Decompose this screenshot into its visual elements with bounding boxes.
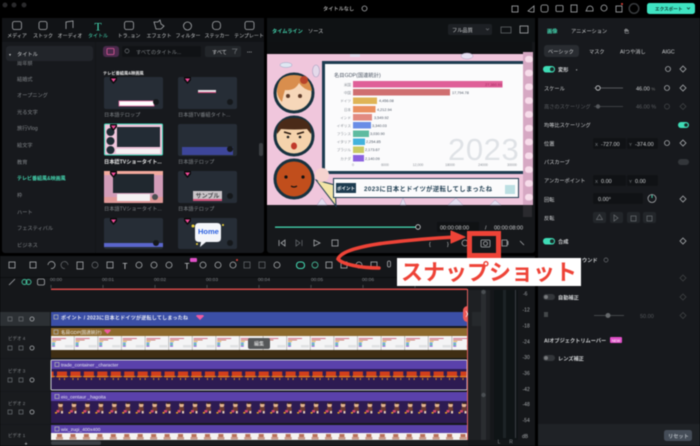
- timeline toolbar: [9, 258, 390, 271]
- callout: snapshot label: スナップショット: [401, 260, 577, 285]
- player header: ソース: [308, 28, 323, 35]
- bar chart: nominal GDP: 4,456.08: [379, 99, 394, 103]
- transform section: 0.00°: [598, 197, 611, 203]
- reset footer: リセット: [668, 433, 689, 440]
- transform section: 46.00 %: [636, 104, 656, 110]
- template card 1: [104, 77, 163, 118]
- library tabs: トラ..ョン: [118, 34, 140, 40]
- template card 6: サンプル: [196, 193, 219, 200]
- template card 3 selected: [104, 124, 162, 166]
- auto correction section: 50.00: [640, 314, 654, 320]
- category sidebar: 教育: [17, 158, 27, 166]
- audio meter scale: -18: [522, 324, 530, 330]
- category sidebar: オープニング: [17, 91, 48, 99]
- transform section: 変形: [558, 66, 569, 74]
- transform section: ▪: [576, 67, 578, 72]
- video track 1: [0, 425, 467, 440]
- template card 6: 日本語テロップ: [178, 204, 215, 212]
- bar chart: nominal GDP: 3,340.03: [372, 124, 387, 128]
- property sub tabs: マスク: [589, 48, 605, 56]
- search bar: すべてのタイトル...: [136, 48, 181, 56]
- export button: [647, 3, 695, 14]
- template card 6: [178, 171, 237, 212]
- decorative stickers: [280, 53, 501, 205]
- library tabs: タイトル: [88, 32, 108, 40]
- callout: snapshot button highlight: [470, 234, 498, 256]
- video preview: [267, 42, 533, 206]
- panel: player: [267, 18, 535, 253]
- bar chart: nominal GDP: 中国: [344, 90, 351, 95]
- reset footer: [538, 424, 700, 446]
- library tabs: ストック: [33, 34, 53, 40]
- bar chart: nominal GDP: 2,173.67: [365, 148, 380, 152]
- category sidebar: 結婚式: [17, 75, 33, 83]
- transform section: 均等比スケーリング: [544, 121, 591, 129]
- transform section: -727.00: [601, 142, 620, 148]
- library tabs: T: [94, 20, 102, 34]
- category sidebar: 周年祭: [17, 59, 33, 67]
- audio meter scale: -6: [523, 292, 528, 298]
- template card 7: [104, 218, 163, 249]
- timeline ruler: 00:04: [258, 277, 270, 283]
- audio meter scale: dB: [522, 434, 529, 440]
- transform section: 46.00 %: [636, 86, 655, 92]
- bar chart: nominal GDP: イギリス: [337, 123, 351, 128]
- film strip extension: [523, 205, 532, 217]
- film strip: [523, 52, 533, 205]
- bar chart: nominal GDP: フランス: [337, 131, 351, 136]
- video track 4: 編集: [254, 340, 264, 348]
- property sub tabs: [544, 45, 675, 57]
- library scrollbar: [259, 143, 263, 156]
- bar chart: nominal GDP: 2,140.09: [365, 157, 380, 161]
- library tabs: メディア: [7, 32, 27, 40]
- template card 3 selected: 日本語TVショータイト...: [104, 158, 162, 166]
- library tabs: フィルター: [176, 32, 200, 40]
- property tabs: [547, 27, 629, 35]
- transform section: Y: [629, 142, 632, 147]
- timeline ruler: [9, 277, 467, 290]
- AI object remover: NEW: [612, 339, 621, 343]
- transform section: X: [595, 179, 598, 184]
- video track 2: [0, 392, 467, 424]
- transform section: スケール: [544, 86, 565, 92]
- bar chart: nominal GDP: 12,000: [413, 163, 423, 167]
- template card 8: [178, 218, 237, 249]
- compositing section: [543, 238, 686, 246]
- character avatars: [275, 74, 313, 198]
- video track 2: ビデオ 2: [8, 400, 26, 407]
- category sidebar: ビジネス: [17, 241, 38, 249]
- bar chart: nominal GDP: 24000: [478, 163, 488, 167]
- transform section: 反転: [544, 215, 554, 222]
- bar chart: nominal GDP: イタリア: [337, 139, 351, 144]
- library tabs: オーディオ: [58, 32, 82, 40]
- bar chart: nominal GDP: インド: [340, 116, 351, 120]
- timeline toolbar: T: [185, 262, 190, 271]
- template card 5: [104, 171, 163, 212]
- timeline toolbar: T: [123, 262, 128, 271]
- category sidebar: 絵文字: [17, 141, 33, 149]
- property tabs: 画像: [547, 27, 558, 35]
- playback progress: 00:00:08:00: [494, 226, 523, 232]
- bar chart: nominal GDP: 17,794.78: [452, 91, 469, 95]
- panel: timeline: [0, 256, 535, 446]
- background section: ウンド: [582, 257, 598, 264]
- category sidebar: ▾: [9, 52, 11, 57]
- library tabs: [7, 20, 264, 40]
- panel: media library: [2, 18, 264, 253]
- transform section: アンカーポイント: [544, 176, 585, 184]
- transform section: 高さのスケーリング: [544, 102, 591, 110]
- lens correction: [543, 354, 584, 362]
- audio meter scale: -36: [522, 371, 530, 377]
- lens correction: レンズ補正: [558, 354, 584, 362]
- template grid: [103, 70, 237, 249]
- category sidebar: [6, 46, 93, 249]
- playback controls: {: [429, 242, 431, 248]
- library tabs: ステッカー: [204, 34, 230, 40]
- video track 4: ビデオ 4: [8, 335, 26, 342]
- timeline ruler: 00:06: [362, 277, 374, 283]
- category sidebar: テレビ番組風&映画風: [17, 175, 66, 182]
- arrow to snapshot button: [338, 231, 465, 268]
- playhead: [463, 289, 472, 440]
- video track 1: wix_zugi_400x400: [61, 427, 101, 433]
- audio meter scale: -42: [522, 387, 530, 393]
- video track 1: ビデオ 1: [8, 432, 26, 439]
- bar chart: nominal GDP: ブラジル: [337, 147, 351, 152]
- playback controls: [279, 240, 524, 248]
- category sidebar: ハート: [17, 210, 33, 216]
- video track 3: [0, 359, 467, 391]
- template card 4: [178, 124, 237, 166]
- property sub tabs: AIつや消し: [620, 48, 646, 56]
- template card 2: 日本語TV番組タイト...: [178, 110, 230, 118]
- timeline ruler: 00:02: [154, 277, 166, 283]
- bar chart: nominal GDP: 米国: [344, 82, 351, 87]
- audio meter scale: L: [498, 440, 501, 446]
- playback progress: /: [485, 226, 487, 232]
- transform section: -374.00: [635, 142, 654, 148]
- ice cream sticker: [315, 168, 336, 206]
- audio meter scale: -54: [522, 418, 530, 424]
- video track 2: eio_centaur _hagoita: [61, 394, 106, 400]
- compositing section: 合成: [558, 238, 569, 246]
- bar chart: nominal GDP: 名目GDP(国連統計): [334, 71, 381, 79]
- background section: [582, 257, 608, 264]
- playback progress: [275, 222, 523, 232]
- timeline bottom bar: [0, 440, 468, 446]
- property tabs: アニメーション: [571, 28, 607, 35]
- window title bar: [2, 2, 639, 13]
- category sidebar: タイトル: [17, 50, 38, 58]
- template grid: テレビ番組風&映画風: [103, 70, 145, 76]
- template card 1: 日本語テロップ: [104, 110, 141, 118]
- bar chart: nominal GDP: 2023: [448, 132, 519, 167]
- template card 5: 日本語TVショータイト...: [104, 204, 162, 212]
- transform section: [543, 66, 689, 223]
- transform section: 回転: [544, 196, 554, 204]
- timeline ruler: 00:03: [206, 277, 218, 283]
- player header: [272, 24, 528, 35]
- bar chart: nominal GDP: 3,030.90: [370, 132, 385, 136]
- video track 4: [0, 327, 467, 358]
- category sidebar: 旅行Vlog: [17, 124, 38, 132]
- category sidebar: 光る文字: [17, 108, 38, 116]
- caption bar: 2023に日本とドイツが逆転してしまったね: [364, 184, 493, 193]
- transform section: 位置: [544, 140, 554, 148]
- audio meter scale: -48: [522, 402, 530, 408]
- audio meter scale: -12: [522, 308, 530, 314]
- auto correction section: 自動補正: [558, 294, 579, 302]
- video track 3: ビデオ 3: [8, 368, 26, 374]
- bar chart: nominal GDP: 2,254.85: [366, 140, 381, 144]
- search bar: [103, 46, 252, 57]
- title track: ポイント / 2023に日本とドイツが逆転してしまったね: [61, 314, 188, 322]
- playback controls: }: [447, 242, 449, 248]
- category sidebar: フェスティバル: [17, 225, 53, 232]
- export button: エクスポート: [655, 6, 682, 12]
- property tabs: 色: [624, 27, 629, 35]
- audio meter scale: -30: [522, 355, 530, 361]
- timeline ruler: 00:01: [102, 277, 114, 283]
- player header: タイムライン: [272, 27, 303, 35]
- bar chart: nominal GDP: 日本: [344, 107, 351, 112]
- panel: properties: [538, 18, 700, 446]
- transform section: X: [595, 142, 598, 147]
- bar chart: nominal GDP: 18000: [445, 163, 455, 167]
- bar chart: nominal GDP: 27,360.93: [485, 83, 502, 87]
- player header: フル品質: [452, 26, 473, 34]
- timeline ruler: 00:00: [50, 277, 62, 283]
- window title bar: タイトルなし: [323, 4, 354, 12]
- bar chart: nominal GDP: カナダ: [340, 156, 351, 161]
- title track: [0, 312, 467, 326]
- transform section: Y: [629, 179, 632, 184]
- bar chart: nominal GDP: 3,549.92: [374, 116, 389, 120]
- audio meter scale: -24: [522, 340, 530, 346]
- auto correction section: [543, 275, 686, 320]
- search bar: ···: [247, 50, 252, 56]
- AI object remover: [544, 336, 622, 344]
- category sidebar: 枠: [17, 191, 22, 199]
- audio level panel: [468, 290, 518, 440]
- bar chart: nominal GDP: 30000: [507, 163, 517, 167]
- audio meter scale: [498, 292, 530, 446]
- bar chart: nominal GDP: [324, 62, 524, 172]
- caption bar: [334, 178, 518, 198]
- transform section: 0.00: [635, 179, 646, 185]
- bar chart: nominal GDP: ドイツ: [340, 99, 351, 103]
- AI object remover: AIオブジェクトリムーバー: [544, 336, 606, 344]
- caption bar: ポイント: [337, 185, 355, 191]
- library tabs: エフェクト: [146, 34, 172, 40]
- bar chart: nominal GDP: 6000: [381, 163, 389, 167]
- property sub tabs: ベーシック: [548, 48, 574, 56]
- template card 2: [178, 77, 237, 118]
- video track 4: 名目GDP(国連統計): [61, 329, 102, 336]
- video track 3: trade_container _character: [61, 362, 119, 368]
- library tabs: テンプレート: [234, 34, 264, 40]
- search bar: すべて: [212, 49, 227, 56]
- playback progress: 00:00:08:00: [440, 226, 469, 232]
- bar chart: nominal GDP: 4,212.94: [377, 108, 392, 112]
- audio meter scale: R: [509, 440, 513, 446]
- template card 8: Home: [198, 227, 219, 236]
- transform section: 0.00: [601, 179, 612, 185]
- template card 4: 日本語テロップ: [178, 158, 215, 166]
- transform section: パスカーブ: [544, 158, 570, 166]
- timeline ruler: 00:05: [311, 277, 323, 283]
- property sub tabs: AIGC: [662, 50, 675, 56]
- bar chart: nominal GDP: 0: [352, 163, 354, 167]
